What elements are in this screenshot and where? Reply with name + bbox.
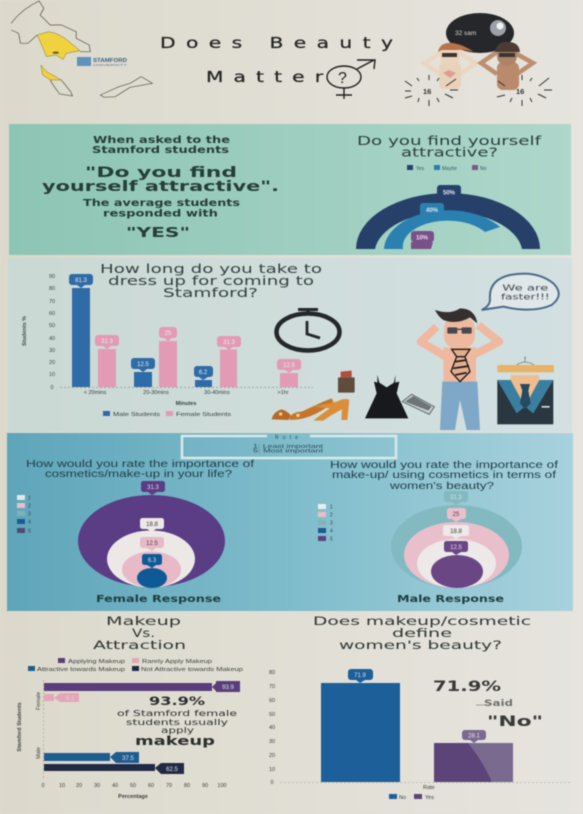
bar chart: 20-30mins [143, 390, 169, 396]
callout: 93.9% apply makeup: makeup [135, 734, 216, 748]
bar chart: 31.3 [101, 339, 113, 345]
horizontal bar chart: 60 [148, 783, 154, 789]
icon: black dress [365, 375, 408, 418]
horizontal bar chart: 70 [166, 783, 172, 789]
heading: female question: How would you rate the importance of [26, 459, 254, 470]
horizontal bar chart: Stamford Students [17, 702, 23, 752]
icon: female figure [424, 43, 476, 89]
icon: speech bubble text [482, 274, 559, 310]
horizontal bar chart: Female [36, 692, 42, 710]
bar chart: 28.1 [468, 734, 480, 740]
chart: female response: 6.3 [148, 558, 157, 564]
heading: Vs. [132, 626, 155, 640]
callout: 71.9% said no: "No" [487, 714, 543, 730]
bar chart: 10 [49, 372, 55, 378]
icon: stopwatch [276, 309, 340, 350]
legend: female: 5 [28, 528, 31, 534]
chart: male response: 12.5 [450, 545, 462, 551]
illustration: accessories and man [272, 274, 559, 430]
horizontal bar chart: 20 [76, 783, 82, 789]
legend: male: 3 [330, 520, 333, 526]
horizontal bar chart: 100 [217, 783, 227, 789]
legend: female: 2 [28, 504, 31, 510]
bar chart [22, 274, 313, 418]
radial chart [356, 185, 540, 249]
bar chart: 30-40mins [204, 390, 230, 396]
bar chart: < 20mins [84, 390, 106, 396]
chart: female response: 18.8 [146, 522, 158, 528]
legend: female [17, 495, 31, 534]
horizontal bar chart: 0 [41, 783, 45, 789]
legend: Applying Makeup [68, 659, 125, 665]
bar chart: 20 [49, 360, 55, 366]
legend: male: 2 [330, 512, 333, 518]
legend [389, 794, 434, 801]
bar chart: 70 [269, 684, 275, 690]
legend: Yes [425, 795, 434, 801]
panel: does makeup define beauty [269, 614, 570, 801]
legend [28, 658, 243, 673]
count: 16 female: 16 [423, 87, 431, 96]
legend: Female Students [176, 412, 231, 418]
heading: Stamford? [163, 286, 258, 300]
chart: female response: 31.3 [147, 485, 159, 491]
icon: shoes [272, 398, 349, 421]
horizontal bar chart: 50 [130, 783, 136, 789]
legend: male: 1 [330, 504, 333, 510]
rate note: 5: Most important [253, 448, 324, 454]
horizontal bar chart: Percentage [118, 794, 148, 800]
panel: do you find yourself attractive [9, 124, 571, 255]
bar chart: 20 [269, 753, 275, 759]
panel: importance of cosmetics [7, 433, 573, 611]
bar chart: 81.3 [75, 278, 87, 284]
legend: Rarely Apply Makeup [142, 659, 212, 665]
logo: Stamford University: UNIVERSITY [93, 63, 127, 67]
callout: 93.9% apply makeup: of Stamford female [117, 709, 237, 718]
chart title [357, 134, 542, 160]
bar chart: 30 [269, 739, 275, 745]
header [11, 1, 552, 106]
legend [407, 165, 487, 172]
rate note: 1: Least important [253, 444, 324, 450]
legend: Maybe [442, 166, 457, 172]
callout: 71.9% said no: Said [484, 699, 513, 709]
logo: Stamford University: STAMFORD [93, 58, 127, 64]
chart title: attractive? [401, 146, 498, 160]
bar chart: 71.9 [354, 673, 366, 679]
legend: male: 5 [330, 536, 333, 542]
legend: No [480, 166, 487, 172]
callout: 93.9% apply makeup: apply [161, 726, 194, 735]
radial chart: 40% [426, 208, 439, 214]
chart: female response: 12.5 [146, 541, 158, 547]
legend [103, 411, 231, 418]
heading: male question: make-up/ using cosmetics in terms of [332, 470, 556, 481]
horizontal bar chart [17, 680, 240, 800]
legend: Yes [416, 166, 425, 172]
icon: gender question symbol [327, 60, 375, 99]
heading: dress up for coming to [108, 274, 314, 288]
horizontal bar chart: 37.5 [122, 756, 134, 762]
label: male response: Male Response [397, 594, 504, 605]
title [160, 35, 393, 86]
label: female response: Female Response [96, 594, 221, 605]
heading: male question [330, 460, 558, 492]
text block: survey question: Stamford students [92, 145, 229, 156]
heading: women's beauty? [339, 638, 502, 652]
panel: dressing time [8, 258, 572, 432]
legend: male [318, 504, 333, 542]
callout: 93.9% apply makeup: students usually [126, 718, 228, 727]
bar chart: 90 [49, 274, 55, 280]
panel: makeup vs attraction [17, 614, 243, 800]
bar chart: Minutes [176, 401, 196, 407]
title: Matter [206, 69, 324, 86]
text block: survey question: yourself attractive". [42, 179, 279, 195]
bar chart: 12.5 [137, 362, 149, 368]
rate note: Rote [275, 435, 298, 441]
count: 16 female [405, 75, 458, 106]
text block: survey question: When asked to the [93, 135, 230, 146]
text block: survey question: "YES" [126, 226, 190, 241]
chart: female response [78, 481, 225, 588]
logo: Stamford University [77, 57, 127, 67]
chart: male response [391, 491, 522, 588]
horizontal bar chart: Male [36, 747, 42, 759]
heading: define [392, 626, 452, 640]
text block: survey question [42, 135, 279, 241]
horizontal bar chart: 62.5 [166, 767, 178, 773]
callout: 71.9% said no: 71.9% [433, 679, 501, 695]
heading: male question: How would you rate the importance of [330, 460, 558, 471]
legend: Male Students [113, 412, 160, 418]
horizontal bar chart: 40 [112, 783, 118, 789]
heading [313, 614, 531, 652]
heading: How long do you take to [100, 262, 322, 276]
bar chart: 40 [49, 336, 55, 342]
chart: male response: 25 [453, 512, 460, 518]
bar chart: 31.3 [223, 340, 235, 346]
heading: female question [26, 459, 254, 480]
heading: female question: cosmetics/make-up in your life? [45, 469, 233, 480]
icon: gender question symbol: ? [338, 70, 347, 87]
bar chart: 6.2 [199, 370, 208, 376]
icon: speech bubble text: faster!!! [501, 292, 550, 301]
horizontal bar chart: 93.9 [222, 685, 234, 691]
count: 16 male [497, 75, 552, 106]
bar chart: 50 [269, 712, 275, 718]
legend: female: 1 [28, 496, 31, 502]
legend: female: 3 [28, 512, 31, 518]
icon: 32 samples speech bubble: 32 sam [455, 30, 476, 37]
heading: Does makeup/cosmetic [313, 614, 531, 628]
bar chart: 12.5 [283, 363, 295, 369]
horizontal bar chart: 6.1 [66, 696, 75, 702]
legend: male: 4 [330, 528, 333, 534]
bar chart: 80 [49, 286, 55, 292]
icon: lipstick [338, 371, 355, 393]
icon: man [421, 308, 499, 430]
bar chart: 0 [50, 385, 54, 391]
icon: 32 samples speech bubble [446, 13, 514, 53]
bar chart: 40 [269, 725, 275, 731]
chart: male response: 31.3 [450, 495, 462, 501]
heading: Attraction [93, 638, 186, 652]
text block: survey question: responded with [103, 208, 218, 220]
bar chart: 60 [269, 698, 275, 704]
text block: survey question: The average students [83, 198, 240, 209]
icon: male figure [481, 42, 533, 90]
horizontal bar chart: 30 [94, 783, 100, 789]
bar chart: 30 [49, 348, 55, 354]
icon: comb [402, 394, 434, 414]
bar chart: 25 [165, 331, 172, 337]
heading [93, 614, 186, 652]
callout: 93.9% apply makeup [117, 694, 237, 748]
bar chart: 60 [49, 311, 55, 317]
heading [100, 262, 322, 300]
chart: male response: 18.8 [450, 529, 462, 535]
legend: Attractive towards Makeup [37, 667, 125, 673]
bar chart: 0 [270, 780, 274, 786]
chart title: Do you find yourself [357, 134, 542, 148]
callout: 71.9% said no [433, 679, 543, 730]
legend: Not Attractive towards Makeup [141, 667, 243, 673]
bar chart: >1hr [277, 390, 289, 396]
bar chart: 80 [269, 670, 275, 676]
rate note [182, 435, 396, 458]
bar chart: 50 [49, 323, 55, 329]
bar chart: 10 [269, 767, 275, 773]
radial chart: 50% [443, 190, 456, 196]
icon: suit on hanger [497, 357, 554, 424]
radial chart: 10% [416, 236, 429, 242]
bar chart: 70 [49, 299, 55, 305]
text block: survey question: "Do you find [85, 165, 237, 181]
horizontal bar chart: 80 [184, 783, 190, 789]
count: 16 male: 16 [516, 87, 524, 96]
icon: speech bubble text: We are [502, 284, 548, 293]
icon: map of Thailand [11, 1, 152, 97]
legend: No [399, 795, 406, 801]
bar chart: Students % [22, 316, 28, 346]
callout: 93.9% apply makeup: 93.9% [149, 694, 206, 708]
title: Does Beauty [160, 35, 393, 52]
legend: female: 4 [28, 520, 31, 526]
bar chart [269, 669, 570, 801]
bar chart: Rate [423, 785, 435, 791]
horizontal bar chart: 10 [59, 783, 65, 789]
heading: male question: women's beauty? [389, 481, 495, 492]
horizontal bar chart: 90 [202, 783, 208, 789]
heading: Makeup [106, 614, 181, 628]
